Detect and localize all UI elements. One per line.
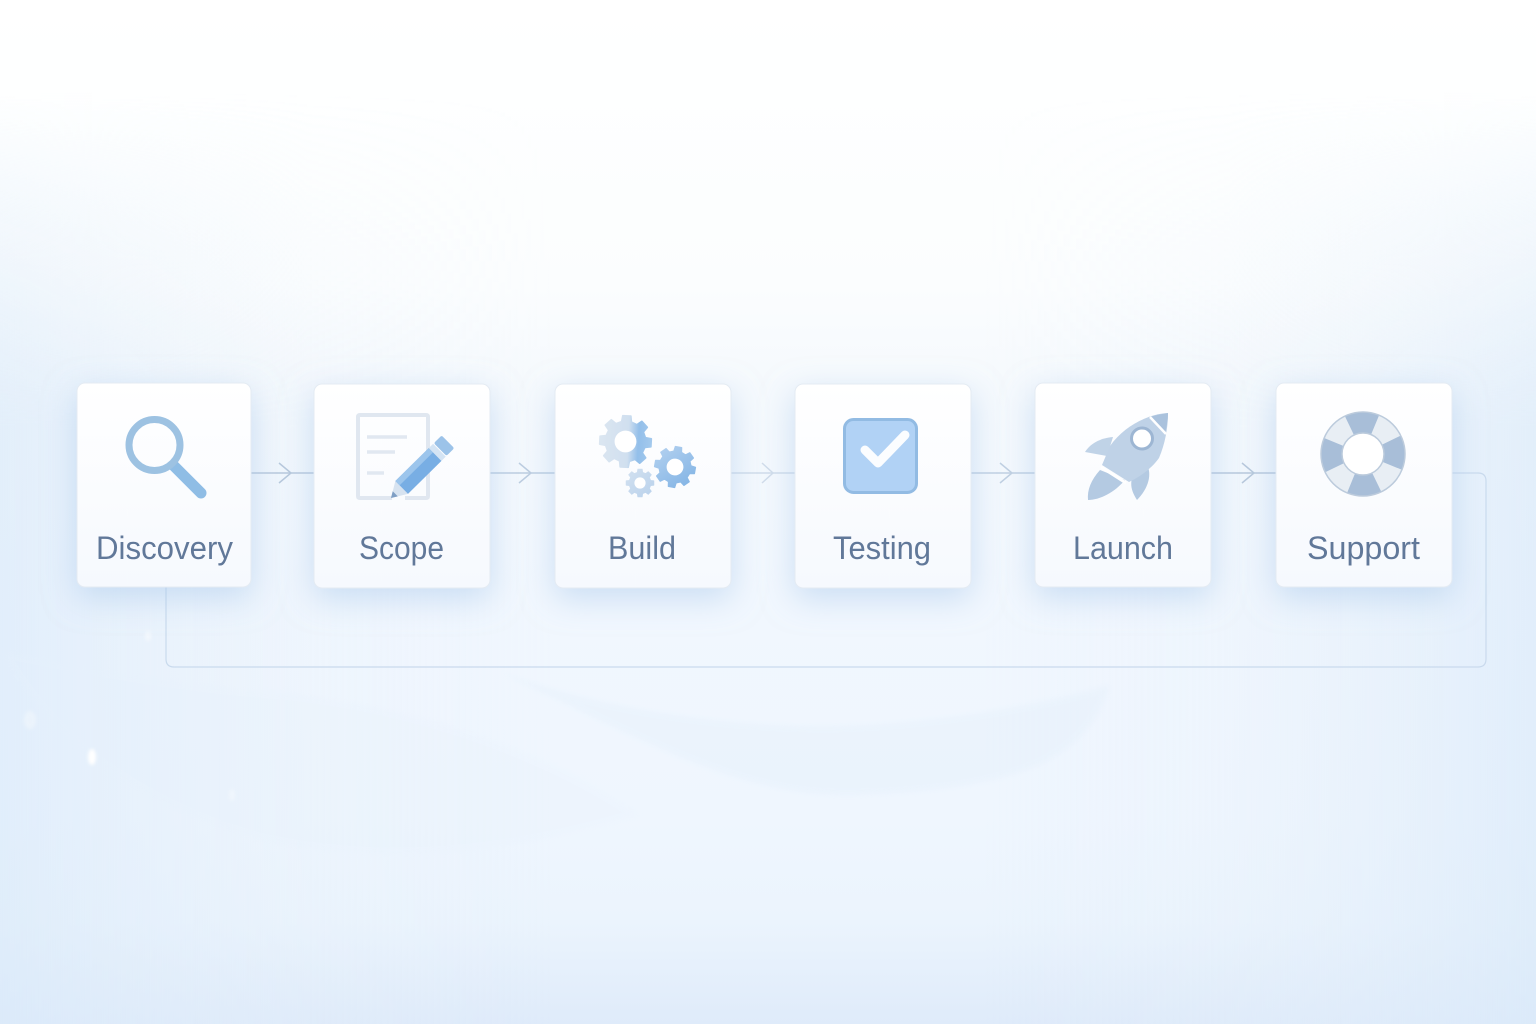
icon: checkbox [844,420,916,492]
panel: Build [555,384,731,588]
icon: document with pencil [358,415,454,504]
icon: lifebuoy [1321,412,1405,496]
arrow: Build to Testing [731,463,795,483]
panel: Launch [1035,383,1211,587]
panel: Testing [795,384,971,588]
arrow: Testing to Launch [971,463,1035,483]
label: Scope: Scope [359,530,444,566]
feedback loop connector [166,473,1486,667]
icon: magnifying glass [129,420,201,493]
arrow: Launch to Support [1211,463,1276,483]
label: Testing: Testing [833,530,931,566]
label: Support: Support [1307,530,1420,566]
icon: gears [599,415,698,497]
icon: rocket [1085,413,1168,500]
panel: Discovery [77,383,251,587]
arrow: Scope to Build [490,463,555,483]
label: Discovery: Discovery [96,530,233,566]
panel: Scope [314,384,490,588]
label: Launch: Launch [1073,530,1173,566]
arrow: Discovery to Scope [251,463,314,483]
label: Build: Build [608,530,676,566]
panel: Support [1276,383,1452,587]
